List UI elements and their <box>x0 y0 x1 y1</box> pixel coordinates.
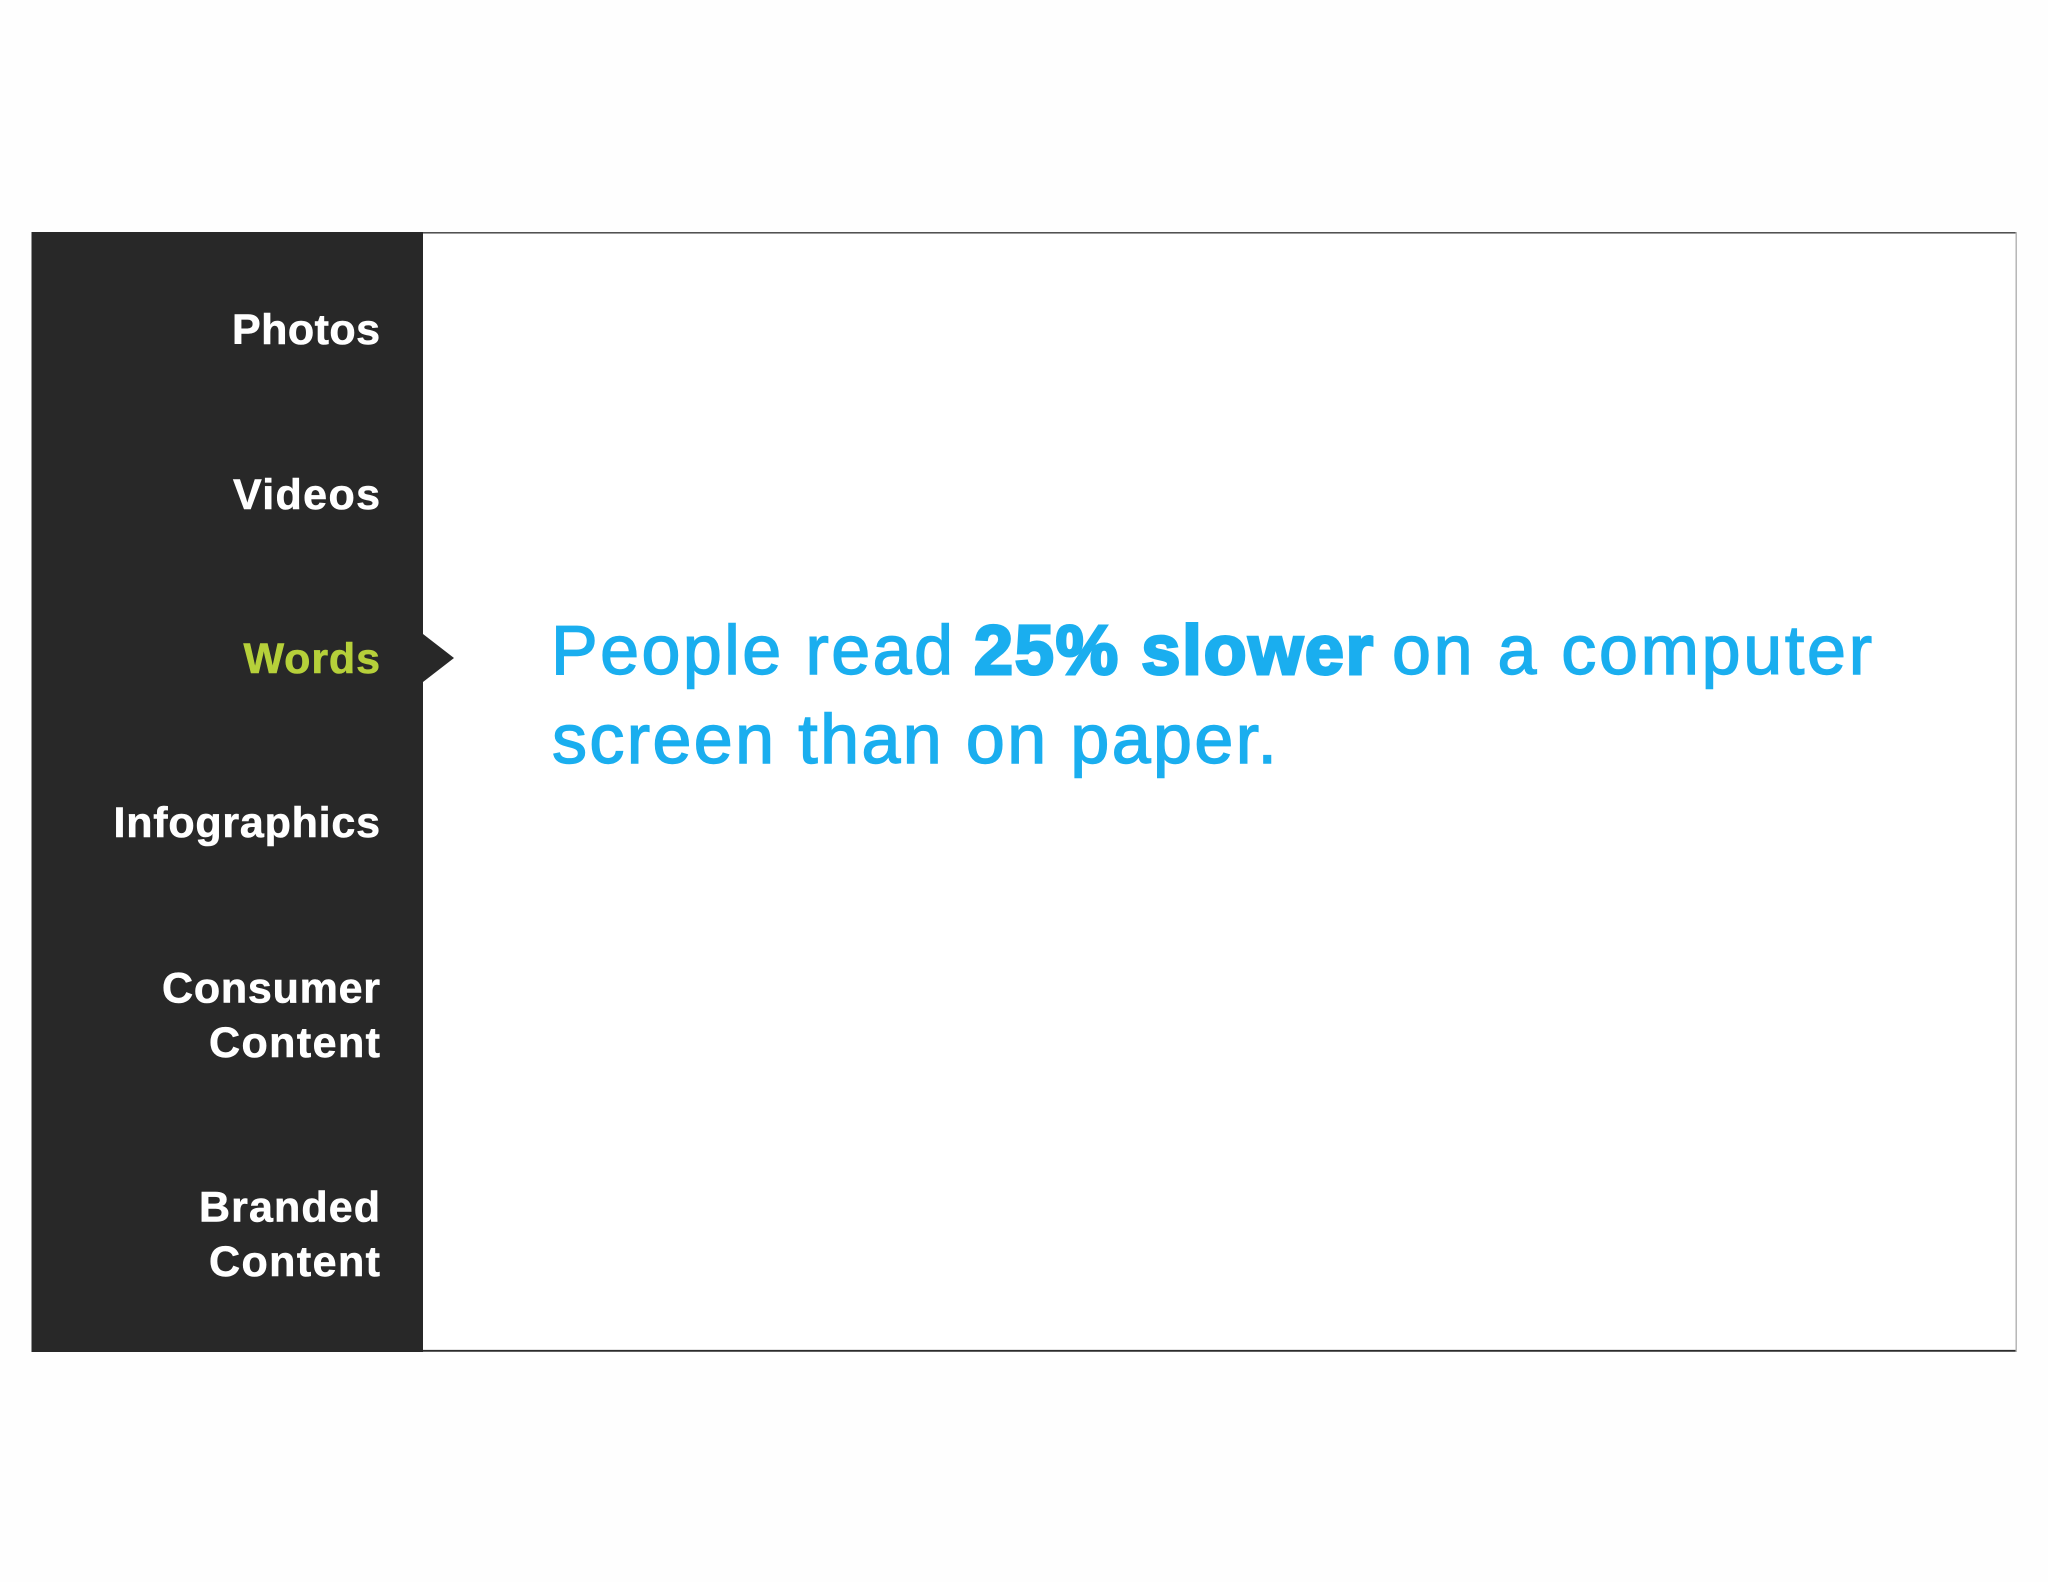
nav item: Infographics: Infographics <box>114 799 380 847</box>
headline statement <box>551 611 1872 778</box>
nav item: Words (active): Words <box>244 635 380 683</box>
icon: active item arrow <box>423 634 454 682</box>
nav item: Photos: Photos <box>232 306 380 354</box>
headline statement: 25% slower <box>974 611 1373 689</box>
nav item: Branded Content <box>199 1184 380 1286</box>
headline statement: on a computer <box>1392 611 1872 689</box>
headline statement: People read <box>551 611 953 689</box>
nav item: Consumer Content: Consumer <box>162 964 380 1012</box>
nav item: Consumer Content: Content <box>209 1019 380 1067</box>
headline statement: screen than on paper. <box>552 700 1277 778</box>
nav item: Branded Content: Content <box>209 1238 380 1286</box>
nav item: Consumer Content <box>162 964 380 1067</box>
nav item: Branded Content: Branded <box>199 1184 380 1232</box>
panel: main content area <box>423 232 2016 1352</box>
nav item: Videos: Videos <box>233 471 380 519</box>
panel: navigation sidebar <box>32 232 454 1352</box>
